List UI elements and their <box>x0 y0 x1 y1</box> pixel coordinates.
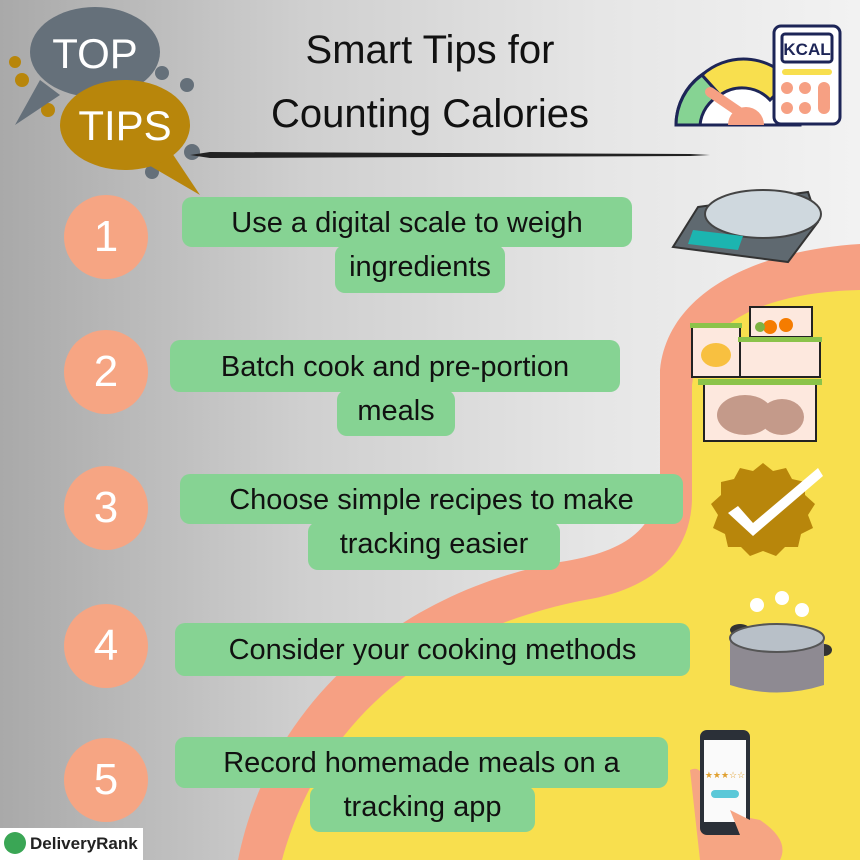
number 4: 4 <box>94 621 118 670</box>
text: ingredients <box>349 251 491 283</box>
tip 3 <box>64 466 683 570</box>
number 3: 3 <box>94 483 118 532</box>
icon: check badge <box>711 463 823 556</box>
badge: top tips <box>9 7 200 195</box>
text: Record homemade meals on a <box>223 747 620 779</box>
number 2 <box>64 330 148 414</box>
number 4 <box>64 604 148 688</box>
text 3 <box>180 474 683 570</box>
number 5 <box>64 738 148 822</box>
title: Smart Tips for <box>306 28 554 72</box>
number 5: 5 <box>94 755 118 804</box>
icon: phone in hand <box>690 730 782 860</box>
title: Counting Calories <box>271 92 589 136</box>
badge: top tips: TIPS <box>78 102 172 149</box>
number 3 <box>64 466 148 550</box>
icon: digital scale <box>671 189 822 264</box>
icon: kcal gauge: KCAL <box>783 40 831 59</box>
text 5 <box>175 737 668 832</box>
number 1 <box>64 195 148 279</box>
text: meals <box>357 395 435 427</box>
tip 4 <box>64 604 690 688</box>
tip 5 <box>64 737 668 832</box>
icon: cooking pot <box>729 591 832 692</box>
text: tracking easier <box>340 528 528 560</box>
tip 1 <box>64 195 632 293</box>
badge: top tips: TOP <box>52 30 138 77</box>
text 2 <box>170 340 620 436</box>
title <box>271 28 589 136</box>
text 4: Consider your cooking methods <box>229 634 636 666</box>
text: Choose simple recipes to make <box>229 484 634 516</box>
icon: phone in hand: ★★★☆☆ <box>705 770 745 780</box>
number 1: 1 <box>94 212 118 261</box>
text 4 <box>175 623 690 676</box>
number 2: 2 <box>94 347 118 396</box>
text: Use a digital scale to weigh <box>231 207 583 239</box>
tip 2 <box>64 330 620 436</box>
title underline <box>190 152 710 158</box>
text: Batch cook and pre-portion <box>221 351 569 383</box>
text: tracking app <box>344 791 502 823</box>
icon: meal prep containers <box>690 306 822 442</box>
logo <box>0 828 143 860</box>
text 1 <box>182 197 632 293</box>
icon: kcal gauge <box>674 24 842 126</box>
logo: DeliveryRank <box>30 834 138 853</box>
